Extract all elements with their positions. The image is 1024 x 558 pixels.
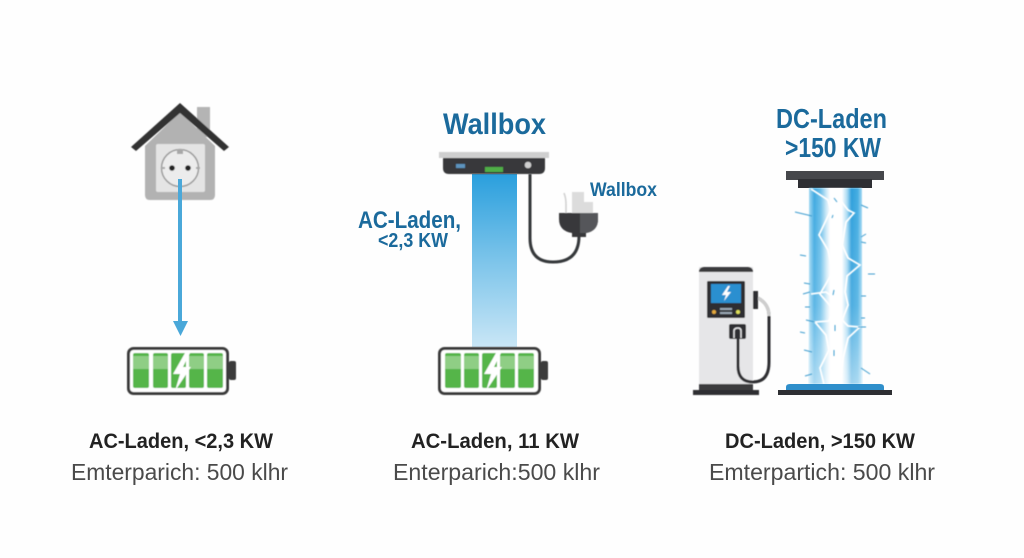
lightning arcs	[811, 189, 860, 384]
caption: left detail: Emterparich: 500 klhr	[71, 459, 288, 485]
caption: right detail: Emterpartich: 500 klhr	[709, 459, 935, 485]
label: power limit: <2,3 KW	[378, 230, 448, 252]
icon: lightning column	[778, 171, 892, 395]
arrow: socket to battery	[173, 179, 188, 336]
energy beam	[809, 188, 862, 384]
house body	[145, 112, 215, 200]
icon: wallbox unit	[439, 152, 549, 174]
heading: Wallbox: Wallbox	[443, 108, 546, 141]
chimney	[197, 107, 210, 137]
blue charge column	[472, 174, 517, 347]
icon: DC charger	[693, 267, 769, 395]
socket	[161, 149, 200, 186]
icon: cable and plug	[530, 174, 598, 262]
caption: middle detail: Enterparich:500 klhr	[393, 459, 600, 485]
socket plate	[156, 144, 205, 192]
icon: battery left	[128, 348, 236, 394]
pillar top plate	[786, 171, 884, 180]
sparks	[795, 198, 875, 376]
icon: battery middle	[440, 348, 548, 394]
caption: left title: AC-Laden, <2,3 KW	[89, 430, 273, 453]
heading: DC-Laden: DC-Laden	[776, 103, 887, 134]
caption: middle title: AC-Laden, 11 KW	[411, 430, 579, 453]
icon: house with wall socket	[131, 103, 229, 200]
label: AC-Laden: AC-Laden,	[358, 207, 461, 234]
roof	[131, 103, 229, 151]
pillar base	[786, 384, 884, 390]
heading: DC power: >150 KW	[785, 132, 881, 163]
caption: right title: DC-Laden, >150 KW	[725, 430, 915, 453]
label: Wallbox small: Wallbox	[590, 180, 657, 201]
